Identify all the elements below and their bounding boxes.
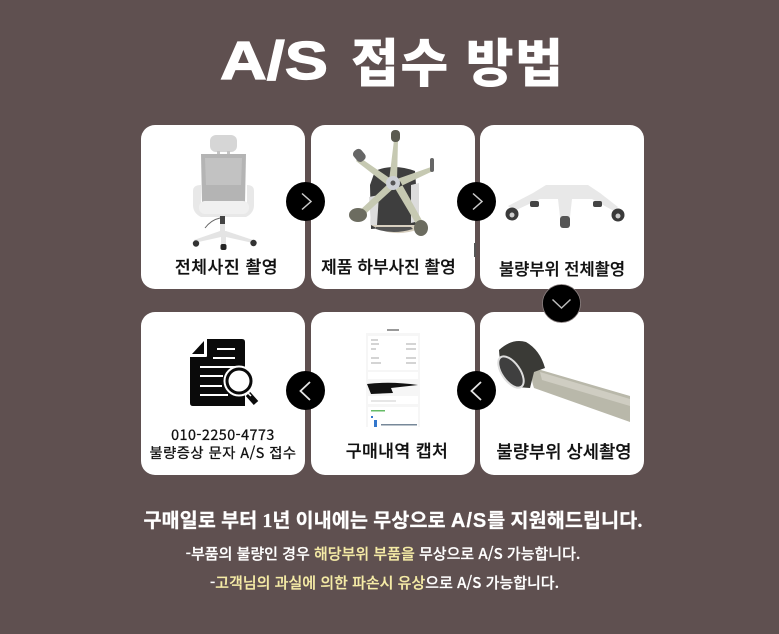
title bbox=[220, 22, 564, 97]
arrow: step 1 to 2 bbox=[286, 182, 325, 221]
icon: document with magnifier bbox=[190, 339, 258, 406]
label: 불량부위 상세촬영 bbox=[496, 438, 632, 464]
phone number and label: 010-2250-4773 bbox=[171, 424, 275, 445]
phone number and label: 불량증상 문자 A/S 접수 bbox=[149, 442, 297, 463]
label: 구매내역 캡처 bbox=[346, 437, 448, 462]
arrow: step 4 to 5 bbox=[457, 371, 496, 410]
icon: broken caster close-up bbox=[497, 341, 630, 422]
icon: chair base bbox=[506, 185, 624, 228]
warranty headline: 구매일로 부터 1년 이내에는 무상으로 A/S를 지원해드립니다. bbox=[143, 510, 643, 532]
panel: SMS A/S report bbox=[141, 312, 305, 475]
phone number and label bbox=[149, 424, 297, 463]
panel: chair underside photo bbox=[311, 125, 475, 289]
panel: full chair photo bbox=[141, 125, 305, 289]
note: customer fault: -고객님의 과실에 의한 파손시 유상으로 A/S 가능합니다. bbox=[210, 572, 559, 593]
title: 접수 방법 bbox=[351, 22, 564, 97]
label: 제품 하부사진 촬영 bbox=[321, 253, 456, 278]
arrow: step 5 to 6 bbox=[286, 371, 325, 410]
arrow: step 2 to 3 bbox=[457, 182, 496, 221]
panel: purchase history capture bbox=[311, 312, 475, 475]
icon: office chair bbox=[192, 135, 257, 250]
icon: phone screenshot bbox=[366, 329, 420, 427]
label: 전체사진 촬영 bbox=[175, 253, 278, 278]
mark: stray text fragment bbox=[474, 243, 476, 257]
panel: defective part overview bbox=[480, 125, 644, 289]
title: A/S bbox=[220, 31, 328, 91]
arrow: step 3 to 4 bbox=[542, 284, 581, 323]
panel: defective part detail bbox=[480, 312, 644, 475]
icon: chair underside bbox=[349, 130, 434, 236]
label: 불량부위 전체촬영 bbox=[499, 256, 625, 280]
note: defective parts: -부품의 불량인 경우 해당부위 부품을 무상으로 A/S 가능합니다. bbox=[186, 543, 580, 564]
